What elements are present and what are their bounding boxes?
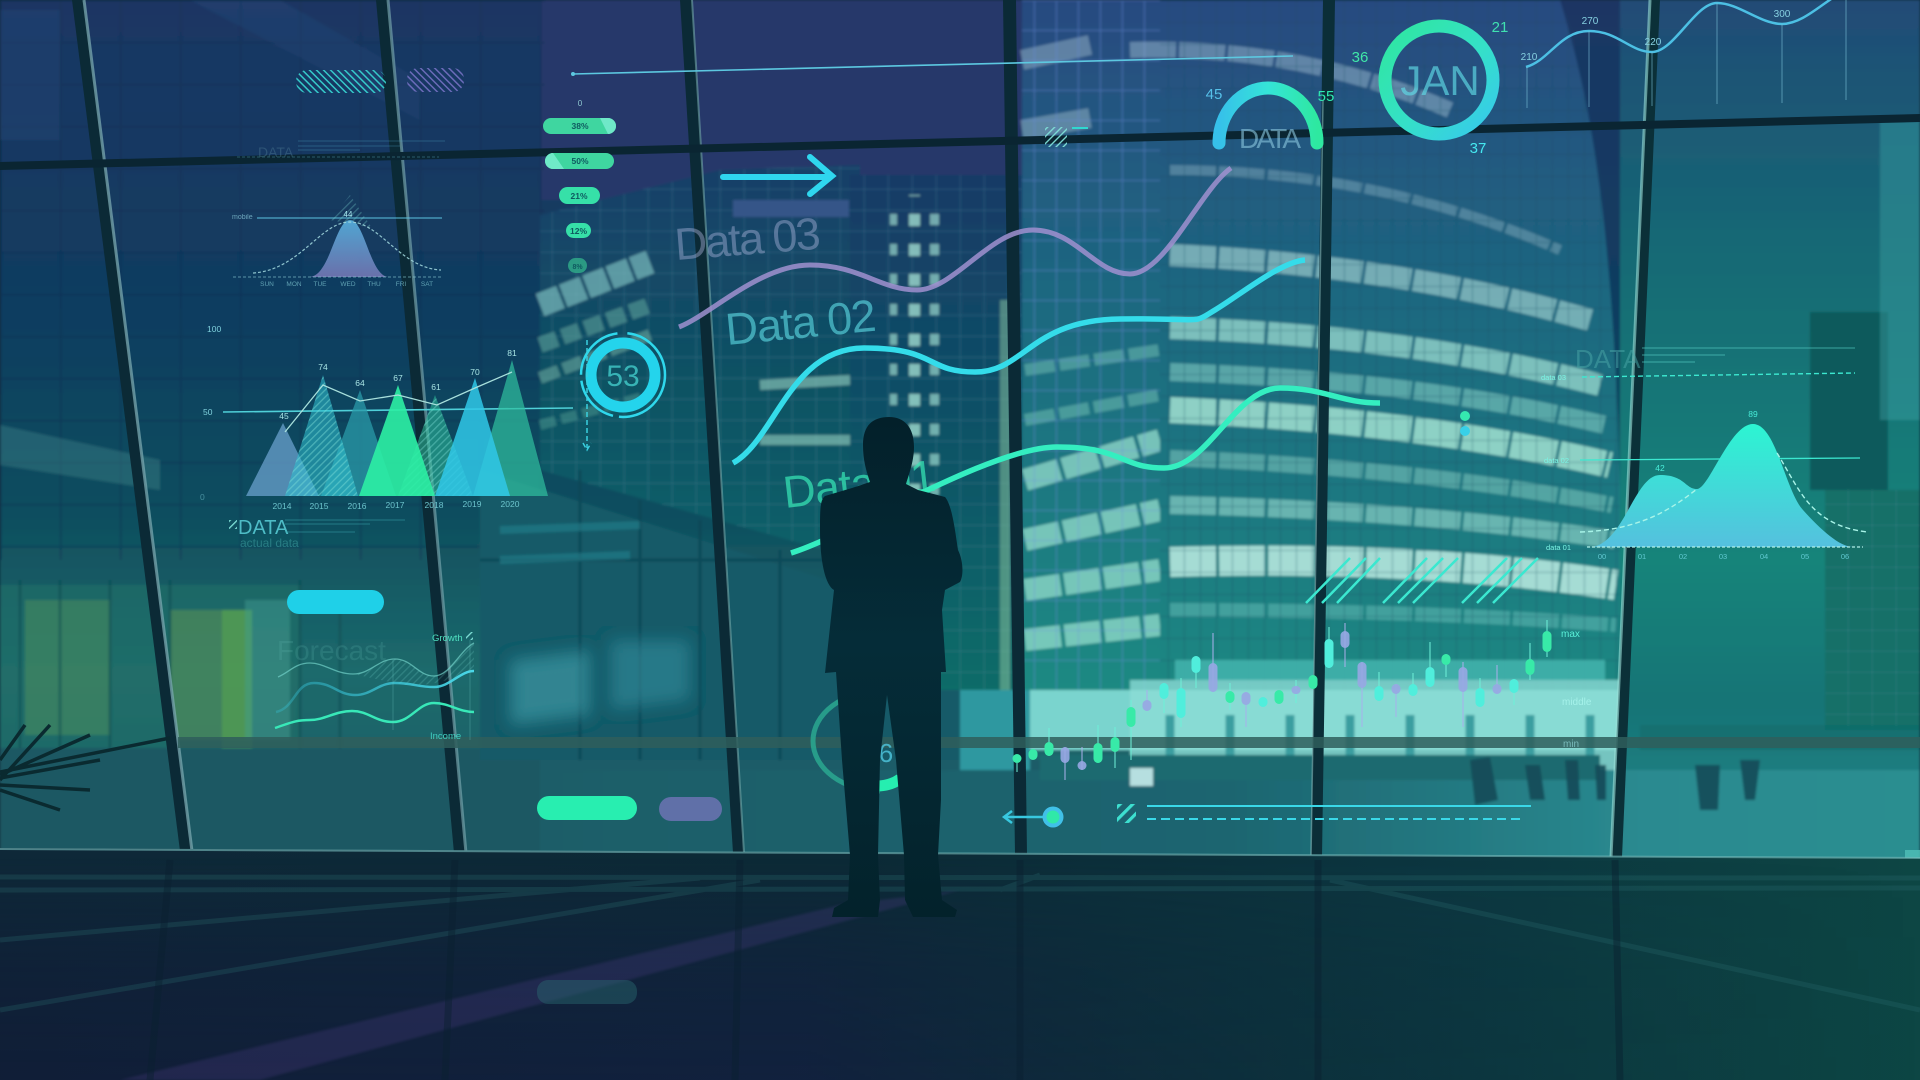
pill 21% xyxy=(559,187,600,204)
person silhouette xyxy=(820,417,962,917)
axis labels: 50 xyxy=(203,407,213,417)
gauge behind person: 6 xyxy=(879,738,893,768)
data arc gauge: 55 xyxy=(1318,88,1334,105)
round tower with lit floor bands xyxy=(1130,0,1622,720)
background: night city through window xyxy=(0,0,1920,860)
label data 02: Data 02 xyxy=(723,290,878,355)
pill 38% xyxy=(543,118,616,134)
right area chart: 42 xyxy=(1655,463,1665,473)
right area chart: 00 xyxy=(1598,552,1606,561)
top right line chart: 210 xyxy=(1521,52,1538,63)
right area chart: 03 xyxy=(1719,552,1727,561)
right area chart: data 03 xyxy=(1541,373,1566,382)
year labels: 2014 xyxy=(273,501,292,511)
right area chart: 06 xyxy=(1841,552,1849,561)
data curve 03 xyxy=(679,168,1231,327)
low dark building with lit floors xyxy=(540,165,860,560)
value labels: 81 xyxy=(507,348,517,358)
triangle 2015 xyxy=(285,375,358,496)
area fill xyxy=(1593,424,1853,547)
weekday axis: THU xyxy=(367,281,381,288)
corner glass tower xyxy=(1022,0,1172,700)
weekday axis xyxy=(260,281,433,288)
small hatch icon xyxy=(1045,127,1088,147)
faint data header top left: DATA xyxy=(258,144,294,160)
value labels: 61 xyxy=(431,382,441,392)
weekday axis: TUE xyxy=(314,281,327,288)
JAN ring: 21 xyxy=(1492,19,1508,36)
pill 8% xyxy=(568,258,587,273)
floor tile lines xyxy=(0,875,1920,1010)
pill 12%: 12% xyxy=(570,226,587,236)
year labels: 2016 xyxy=(348,501,367,511)
right area chart: data 02 xyxy=(1544,456,1569,465)
value labels: 45 xyxy=(279,411,289,421)
dashed arrow xyxy=(583,340,591,450)
mullion 6 xyxy=(1611,0,1660,857)
mid line xyxy=(223,408,573,412)
right area chart: DATA xyxy=(1575,344,1641,374)
data arc gauge: 45 xyxy=(1206,86,1222,103)
axis labels xyxy=(200,324,221,502)
faint data header top left xyxy=(237,141,445,160)
reflective lower block xyxy=(480,470,1040,855)
gauge 53: 53 xyxy=(606,360,640,393)
lower rail xyxy=(178,737,1920,748)
year labels xyxy=(273,499,520,511)
candlestick chart xyxy=(1012,620,1592,780)
percent pills xyxy=(543,99,616,273)
triangle 2017 xyxy=(359,385,435,496)
top right line chart xyxy=(1521,0,1846,108)
hatched pills top left xyxy=(296,68,464,93)
JAN ring: 37 xyxy=(1470,140,1486,157)
growth wave chart: Growth xyxy=(432,633,463,644)
right area chart: 89 xyxy=(1748,409,1758,419)
pill reflection xyxy=(537,980,637,1004)
dashed curve xyxy=(253,222,441,273)
JAN ring: JAN xyxy=(1400,57,1480,104)
value labels: 74 xyxy=(318,362,328,372)
pill 50% xyxy=(545,153,614,169)
vertical reflections xyxy=(150,860,1620,1080)
right area chart: 01 xyxy=(1638,552,1646,561)
label data 03: Data 03 xyxy=(673,208,822,270)
data curve 01 xyxy=(791,388,1380,553)
year labels: 2015 xyxy=(310,501,329,511)
scale labels: middle xyxy=(1562,697,1592,708)
bell curve chart: mobile xyxy=(232,214,253,221)
weekday axis: WED xyxy=(340,281,356,288)
mullion 2 xyxy=(376,0,466,853)
top right line chart: 220 xyxy=(1645,37,1662,48)
transom xyxy=(0,114,1920,170)
value labels: 64 xyxy=(355,378,365,388)
wicks xyxy=(1017,620,1547,780)
diagonal stripes xyxy=(1306,558,1538,603)
top right line chart: 270 xyxy=(1582,16,1599,27)
weekday axis: SAT xyxy=(421,281,433,288)
axis labels: 0 xyxy=(200,492,205,502)
top long line xyxy=(571,56,1293,76)
right edge xyxy=(1905,850,1920,886)
JAN ring xyxy=(1352,19,1508,157)
hatch peak xyxy=(330,195,372,228)
purple candles xyxy=(1060,631,1502,770)
sky xyxy=(540,0,1040,200)
pill 21%: 21% xyxy=(570,191,588,201)
value labels: 67 xyxy=(393,373,403,383)
value labels: 70 xyxy=(470,367,480,377)
right area chart: 05 xyxy=(1801,552,1809,561)
two dots xyxy=(1460,411,1470,436)
bell curve chart xyxy=(232,195,442,288)
year labels: 2018 xyxy=(425,500,444,510)
mullion 5 xyxy=(1311,0,1335,857)
cyan pill xyxy=(287,590,384,614)
mullion 3 xyxy=(680,0,744,853)
weekday axis: MON xyxy=(286,281,302,288)
triangle bar chart xyxy=(200,324,573,511)
pill 12% xyxy=(566,223,591,238)
pill 50%: 50% xyxy=(571,156,589,166)
data block left: DATA xyxy=(238,517,289,539)
right area chart: 04 xyxy=(1760,552,1768,561)
triangle 2016 xyxy=(321,390,396,496)
gauge 53 xyxy=(581,333,665,450)
growth wave chart xyxy=(275,632,474,742)
triangle 2020 xyxy=(473,360,548,496)
weekday axis: SUN xyxy=(260,281,274,288)
purple light beam xyxy=(120,890,960,1080)
cyan candles xyxy=(1160,639,1518,718)
right open area xyxy=(1620,0,1920,860)
top right line chart: 300 xyxy=(1774,9,1791,20)
floor xyxy=(0,848,1920,1080)
left office block xyxy=(0,0,700,853)
triangle 2019 xyxy=(435,378,510,496)
label data 01: Data 01 xyxy=(780,450,938,518)
gauge behind person xyxy=(813,691,900,791)
green pill xyxy=(537,796,637,820)
bottom slider xyxy=(1004,806,1064,828)
trend line xyxy=(285,372,512,432)
year labels: 2019 xyxy=(463,499,482,509)
green candles xyxy=(1012,631,1552,763)
scale labels: min xyxy=(1563,739,1579,750)
glass base edge xyxy=(0,849,1920,858)
mullion 1 xyxy=(72,0,192,851)
mullion 4 xyxy=(1003,0,1027,855)
growth wave chart: Forecast xyxy=(277,635,386,666)
data block left xyxy=(229,517,405,550)
right area chart: data 01 xyxy=(1546,543,1571,552)
data curve 02 xyxy=(733,260,1305,463)
growth wave chart: Income xyxy=(430,731,461,742)
right area chart xyxy=(1541,344,1867,561)
scale labels: max xyxy=(1561,629,1580,640)
pill 8%: 8% xyxy=(572,264,583,271)
right area chart: 02 xyxy=(1679,552,1687,561)
JAN ring: 36 xyxy=(1352,49,1368,66)
triangle 2014 xyxy=(246,423,319,496)
value labels xyxy=(279,348,517,421)
axis labels: 100 xyxy=(207,324,221,334)
bottom lines xyxy=(1117,804,1531,823)
bell area xyxy=(309,220,389,277)
scale labels xyxy=(1561,629,1592,750)
year labels: 2017 xyxy=(386,500,405,510)
pill 38%: 38% xyxy=(571,121,589,131)
year labels: 2020 xyxy=(501,499,520,509)
data block left: actual data xyxy=(240,536,299,550)
weekday axis: FRI xyxy=(396,281,406,288)
purple pill xyxy=(659,797,722,821)
data arc gauge xyxy=(1206,86,1334,154)
zero label: 0 xyxy=(578,99,583,108)
dashed curve xyxy=(1580,453,1867,532)
plant xyxy=(0,725,170,810)
street with pedestrians xyxy=(540,755,1920,860)
arrow xyxy=(723,157,832,194)
bell curve chart: 44 xyxy=(344,210,353,219)
triangle 2018 xyxy=(398,395,473,496)
central dark tower xyxy=(850,175,1025,720)
podium xyxy=(960,660,1620,770)
data arc gauge: DATA xyxy=(1239,123,1301,154)
